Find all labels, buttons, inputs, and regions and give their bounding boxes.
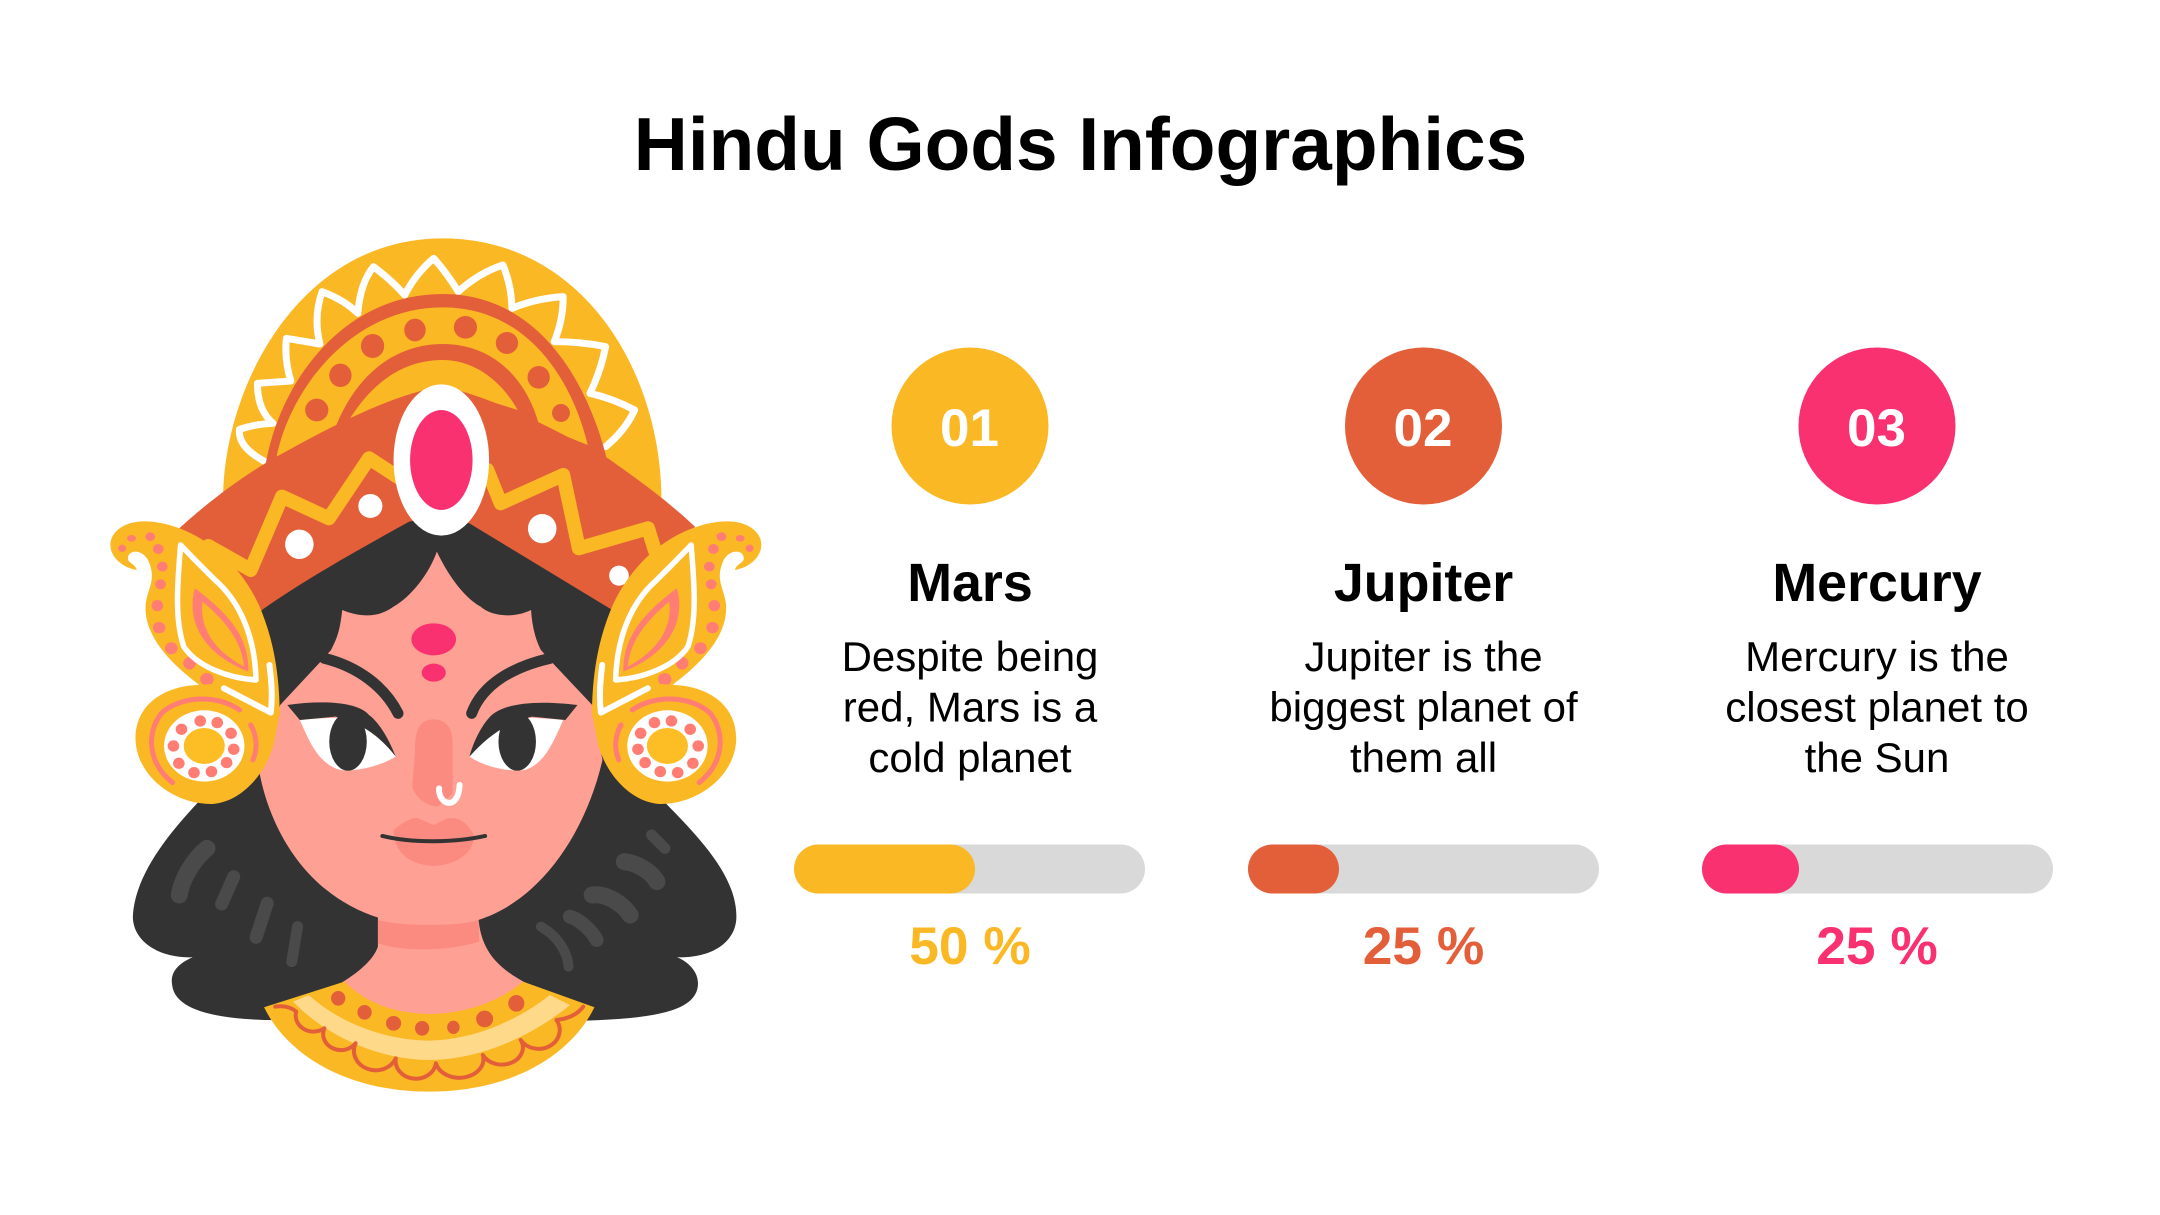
description: Jupiter: Jupiter is the	[1304, 633, 1543, 680]
description: Mercury: closest planet to	[1725, 684, 2029, 730]
crown band	[179, 387, 695, 620]
hair, neck and face	[133, 517, 736, 1092]
description: Jupiter: biggest planet of	[1269, 684, 1578, 730]
description: Mars: cold planet	[868, 734, 1072, 781]
left ornament and earring	[110, 521, 280, 804]
value: 50 %: 50 %	[909, 917, 1031, 976]
description: Mercury: Mercury is the	[1745, 633, 2009, 680]
heading: Jupiter: Jupiter	[1334, 553, 1513, 613]
panel: Mercury	[1702, 348, 2053, 976]
illustration: Hindu goddess portrait	[110, 238, 761, 1092]
progress bar 50%	[794, 844, 1145, 894]
description: Mars: red, Mars is a	[843, 684, 1098, 730]
number badge 02: 02	[1394, 399, 1452, 458]
progress bar 25%	[1702, 844, 2053, 894]
value: 25 %: 25 %	[1363, 917, 1484, 976]
panel: Mars	[794, 348, 1145, 976]
description: Mercury: the Sun	[1805, 734, 1949, 781]
right ornament and earring	[592, 521, 761, 804]
necklace	[264, 982, 594, 1092]
value: 25 %: 25 %	[1816, 917, 1938, 976]
panel: Jupiter	[1248, 348, 1599, 976]
number badge 03: 03	[1847, 399, 1906, 458]
number badge 01	[892, 348, 1048, 504]
crown jewel	[394, 384, 489, 536]
progress bar 25%	[1248, 844, 1599, 894]
number badge 02	[1345, 348, 1502, 504]
description: Jupiter: them all	[1350, 734, 1497, 781]
number badge 01: 01	[940, 399, 999, 458]
heading: Mars: Mars	[907, 553, 1033, 613]
heading: Mercury: Mercury	[1772, 553, 1982, 613]
halo and crown top	[179, 238, 695, 620]
description: Mars: Despite being	[842, 633, 1098, 680]
number badge 03	[1798, 348, 1956, 504]
title: Hindu Gods Infographics	[634, 102, 1527, 186]
